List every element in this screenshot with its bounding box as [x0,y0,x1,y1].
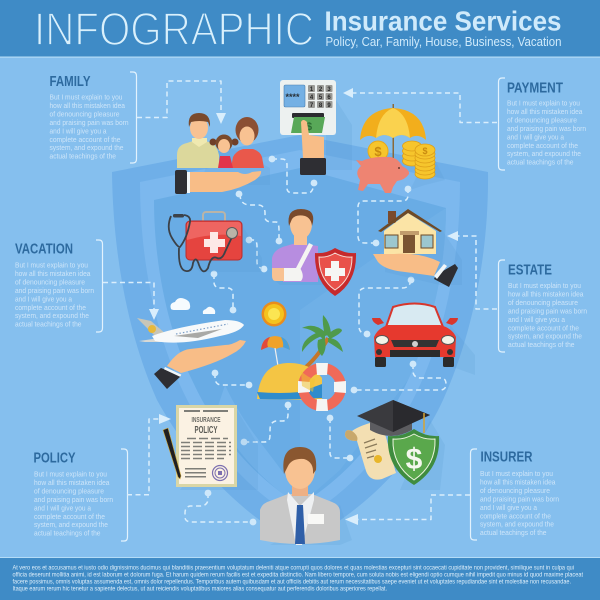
hand [190,171,261,192]
icon: insurance policy document [163,405,258,490]
icon: ATM payment: 3 [327,87,331,93]
icon: ATM payment: 2 [319,87,323,93]
panel: estate [447,231,587,352]
icon: island with beach umbrella and palm [257,315,343,400]
arrow: estate [447,231,497,309]
text block: payment: But I must explain to you [507,98,580,108]
icon: ATM payment: 1 [310,87,314,93]
text block: estate: and praising pain was born [508,306,587,315]
pen [163,428,181,479]
text block: policy: complete account of the [34,512,105,521]
diploma [345,420,396,480]
icon: umbrella and piggy bank [356,104,445,193]
text block: family: and I will give you a [50,126,107,135]
text block: policy: and I will give you a [34,503,92,512]
icon: ATM payment: 4 [310,95,314,101]
text block: vacation: But I must explain to you [15,260,88,270]
text block: vacation [15,260,94,329]
text block: policy: how all this mistaken idea [34,478,110,487]
icon: ATM payment: $ [306,121,312,133]
heading: Insurance Services: Insurance Services [324,6,562,36]
heading: vacation: VACATION [15,242,73,258]
text block: policy: system, and expound the [34,520,108,529]
header band [0,0,600,58]
text block: family: complete account of the [50,135,120,144]
icon: graduation cap, diploma and green shield [345,400,445,490]
text block: policy [34,470,113,538]
coin [368,141,388,161]
text block: payment [507,98,586,167]
text block: insurer: system, and expound the [480,520,554,529]
shield [388,429,439,485]
text block: estate: of denouncing pleasure [508,298,578,307]
man [177,113,219,168]
heading: insurer: INSURER [480,450,533,466]
text block: payment: and praising pain was born [507,124,586,133]
icon: medical bag with stethoscope [169,212,262,272]
icon: ATM payment: 6 [327,95,331,101]
woman [231,117,264,168]
shield [315,248,356,296]
text block: payment: complete account of the [507,141,578,150]
footer band [0,557,600,600]
icon: family in hand [175,113,270,194]
text block: vacation: system, and expound the [15,311,89,320]
icon: sun [262,302,286,326]
text block: vacation: and I will give you a [15,294,73,303]
text block: estate: complete account of the [508,323,579,332]
arrow: family [137,81,226,124]
heading: estate: ESTATE [508,262,552,278]
icon: ATM payment [280,80,352,175]
text block: insurer: and praising pain was born [480,494,559,503]
panel: payment [343,78,586,170]
heading: family: FAMILY [50,74,91,90]
hand [167,340,246,373]
icon: insurer person [260,447,352,545]
text block: insurer: of denouncing pleasure [480,486,550,495]
icon: injured person with shield [272,209,356,296]
icon: insurance policy document: POLICY [194,425,218,436]
text block: estate: But I must explain to you [508,281,581,290]
icon: umbrella and piggy bank: $ [422,146,428,156]
text block: payment: and I will give you a [507,132,565,141]
panel: family [50,72,226,163]
text block: family: of denouncing pleasure [50,109,120,118]
icon: lifebuoy [298,363,346,411]
piggy [356,157,409,193]
text block: family: actual teachings of the [50,152,116,161]
icon: clouds [170,298,215,314]
text block: insurer: complete account of the [480,511,551,520]
footer text [12,564,583,592]
arrow: policy [127,414,171,495]
icon: red car [372,304,475,375]
panel: vacation [15,240,159,332]
icon: graduation cap, diploma and green shield: $ [406,443,423,476]
arrow: vacation [103,282,159,320]
text block: estate: how all this mistaken idea [508,290,584,298]
text block: insurer: actual teachings of the [480,528,546,537]
icon: airplane in hand [137,318,246,389]
icon: ATM payment: 9 [327,103,331,109]
text block: family [50,92,128,161]
text block: policy: actual teachings of the [34,529,100,538]
hand [373,254,440,276]
panel: policy [34,414,171,541]
subtitle: Policy, Car, Family, House, Business, Vacation [326,35,562,49]
text block: family: system, and expound the [50,143,124,152]
text block: policy: of denouncing pleasure [34,486,104,495]
text block: payment: of denouncing pleasure [507,115,577,124]
stethoscope [169,215,232,271]
text block: vacation: complete account of the [15,303,86,312]
text block: vacation: and praising pain was born [15,286,94,295]
text block: vacation: of denouncing pleasure [15,277,85,286]
icon: ATM payment: 5 [319,95,323,101]
coin stacks [402,141,435,179]
heading: policy: POLICY [34,450,76,466]
arrow: payment [343,88,497,122]
icon: ATM payment: **** [286,92,300,102]
text block: insurer [480,469,559,537]
icon: ATM payment: 7 [310,103,314,109]
text block: payment: system, and expound the [507,149,581,158]
text block: insurer: and I will give you a [480,503,538,512]
panel: insurer [345,449,559,540]
text block: insurer: how all this mistaken idea [480,478,556,486]
heading: payment: PAYMENT [507,80,563,96]
text block: family: But I must explain to you [50,92,122,102]
background shield [112,135,488,545]
cap [370,414,412,436]
footer text: Itaque earum rerum hic tenetur a sapiente delectus, ut aut reiciendis voluptatibus maiores alias consequatur aut perferendis doloribus asperiores repellat. [12,586,387,592]
arrow: insurer [345,495,470,525]
text block: family: and praising pain was born [50,118,128,127]
icon: house in hand [373,209,462,287]
text block: estate [508,281,587,349]
text block: payment: actual teachings of the [507,158,574,167]
text block: vacation: how all this mistaken idea [15,269,91,278]
text block: estate: system, and expound the [508,332,582,341]
icon: ATM payment: 8 [319,103,323,109]
text block: policy: and praising pain was born [34,495,113,504]
text block: estate: and I will give you a [508,315,566,324]
dotted connectors [185,156,446,525]
title: INFOGRAPHIC [34,3,314,55]
icon: umbrella and piggy bank: $ [374,144,382,159]
girl [210,134,238,168]
text block: insurer: But I must explain to you [480,469,553,478]
text block: vacation: actual teachings of the [15,320,82,329]
text block: policy: But I must explain to you [34,470,107,478]
text block: payment: how all this mistaken idea [507,107,583,116]
text block: estate: actual teachings of the [508,340,574,349]
icon: insurance policy document: INSURANCE [192,417,221,424]
text block: family: how all this mistaken idea [50,101,126,110]
